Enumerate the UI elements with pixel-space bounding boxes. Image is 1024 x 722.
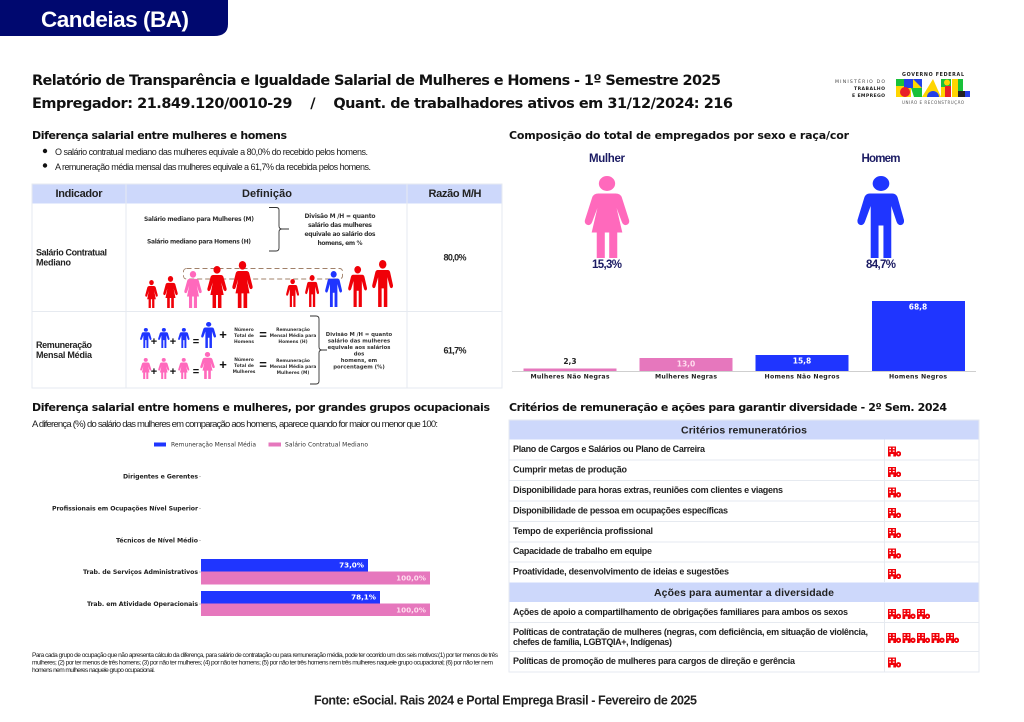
rows: ações: Ações de apoio a compartilhamento de obrigações familiares para ambos os sexos (513, 607, 848, 617)
icon: homem 84,7% (857, 153, 904, 271)
formula: homens: Total de (234, 333, 254, 339)
rows: ações: chefes de família, LGBTQIA+, Indígenas) (513, 637, 672, 647)
definition: salário mediano: Salário mediano para Homens (H) (147, 238, 251, 246)
formula: mulheres: Mensal Média para (270, 363, 316, 370)
icons: empresas ações (888, 609, 959, 668)
icon: mulher 15,3%: Mulher (589, 153, 626, 165)
formula: mulheres: Total de (234, 363, 254, 369)
chart legend (154, 442, 368, 448)
formula: homens: Número (234, 326, 254, 333)
formula: homens: Remuneração (276, 327, 310, 333)
formula: mulheres: Número (234, 356, 254, 363)
table header: Definição (242, 188, 292, 200)
definition: divisão M/H remuneração: porcentagem (%) (333, 364, 385, 370)
formula: homens: = (193, 336, 199, 348)
icon: mulher 15,3% (585, 153, 629, 271)
formula: homens: = (259, 327, 267, 342)
horizontal bar chart: Profissionais em Ocupações Nível Superior (52, 504, 199, 512)
horizontal bar chart: 73,0% (339, 560, 364, 570)
bullet text block: O salário contratual mediano das mulheres equivale a 80,0% do recebido pelos homens. (55, 147, 368, 157)
icons: mulheres ordenadas (145, 261, 342, 308)
definition: salário mediano (144, 208, 376, 251)
report title: Empregador: 21.849.120/0010-29 / Quant. de trabalhadores ativos em 31/12/2024: 216 (32, 96, 733, 112)
rows: critérios: Tempo de experiência profissional (513, 526, 653, 536)
definition: salário mediano: homens, em % (318, 240, 362, 247)
bar chart: sexo e raça: Mulheres Negras (655, 374, 717, 380)
formula: mulheres: + (170, 366, 176, 378)
chart legend: Remuneração Mensal Média (171, 442, 256, 448)
bar chart: sexo e raça: Mulheres Não Negras (530, 374, 610, 380)
formula: mulheres (140, 352, 316, 379)
table header: Razão M/H (428, 188, 482, 200)
heading: composição: Composição do total de empregados por sexo e raça/cor (509, 129, 850, 142)
rows: critérios: Disponibilidade de pessoa em ocupações específicas (513, 506, 728, 516)
rows: ações: Políticas de promoção de mulheres para cargos de direção e gerência (513, 656, 796, 666)
formula: homens: + (151, 336, 157, 348)
rows: critérios: Cumprir metas de produção (513, 464, 628, 474)
source note: Fonte: eSocial. Rais 2024 e Portal Emprega Brasil - Fevereiro de 2025 (314, 694, 697, 708)
formula: mulheres: + (219, 357, 227, 372)
report title (32, 73, 733, 112)
horizontal bar chart: 100,0% (396, 606, 426, 614)
definition: divisão M/H remuneração: Divisão M /H = quanto (326, 332, 393, 338)
definition: divisão M/H remuneração: equivale aos salários (328, 344, 390, 351)
rows: critérios: Disponibilidade para horas extras, reuniões com clientes e viagens (513, 485, 783, 495)
formula: homens: + (170, 336, 176, 348)
report title: Relatório de Transparência e Igualdade Salarial de Mulheres e Homens - 1º Semestre 2025 (32, 73, 721, 89)
rows: critérios: Proatividade, desenvolvimento de ideias e sugestões (513, 566, 729, 576)
definition: divisão M/H remuneração: homens, em (341, 358, 378, 364)
formula: mulheres: Mulheres (M) (277, 370, 309, 376)
logo: Ministério do Trabalho e Emprego / Governo Federal: TRABALHO (854, 86, 885, 92)
value: 80,0%: 80,0% (444, 252, 466, 262)
bar chart: sexo e raça (512, 301, 976, 380)
bar chart: sexo e raça: 2,3 (563, 357, 577, 366)
horizontal bar chart: Dirigentes e Gerentes (123, 474, 198, 480)
footnote: homens nem mulheres naquele grupo ocupacional. (32, 667, 155, 674)
bullet text block: A remuneração média mensal das mulheres equivale a 61,7% da recebida pelos homens. (55, 162, 371, 172)
logo: Ministério do Trabalho e Emprego / Governo Federal: GOVERNO FEDERAL (902, 72, 964, 78)
horizontal bar chart: Técnicos de Nível Médio (116, 536, 198, 544)
panel: diferença salarial entre mulheres e homens (32, 129, 502, 388)
rows: ações: Políticas de contratação de mulheres (negras, com deficiência, em situação de violência, (513, 627, 868, 637)
subheading text: A diferença (%) do salário das mulheres em comparação aos homens, aparece quando for maior ou menor que 100: (32, 419, 438, 430)
icons: homens ordenados (286, 260, 393, 307)
logo: Ministério do Trabalho e Emprego / Governo Federal: MINISTÉRIO DO (835, 77, 885, 85)
footnote (32, 652, 499, 674)
horizontal bar chart (52, 474, 430, 616)
row label: remuneração mensal média: Remuneração (36, 340, 92, 350)
horizontal bar chart: 100,0% (396, 574, 426, 582)
definition: salário mediano: Divisão M /H = quanto (304, 213, 376, 220)
formula: mulheres: = (259, 357, 267, 372)
logo: Ministério do Trabalho e Emprego / Governo Federal (835, 72, 970, 105)
horizontal bar chart: Trab. em Atividade Operacionais (87, 601, 198, 608)
rows: critérios: Plano de Cargos e Salários ou Plano de Carreira (513, 444, 706, 454)
definition: salário mediano: Salário mediano para Mulheres (M) (144, 216, 254, 223)
formula: homens: Mensal Média para (270, 332, 316, 339)
icons: empresas critérios (888, 446, 901, 579)
bar chart: sexo e raça: 15,8 (793, 356, 811, 366)
table: indicadores (32, 184, 502, 388)
icon: homem 84,7%: 84,7% (866, 259, 896, 271)
section header: critérios remuneratórios: Critérios remuneratórios (681, 424, 807, 436)
formula: mulheres: = (193, 366, 199, 378)
row label: salário contratual mediano (36, 248, 107, 268)
row label: remuneração mensal média: Mensal Média (36, 350, 93, 360)
row label: remuneração mensal média (36, 340, 93, 360)
definition: salário mediano: equivale ao salário dos (304, 231, 376, 238)
header tab: Candeias (BA) (0, 0, 228, 36)
horizontal bar chart: 78,1% (351, 592, 376, 602)
panel: diferença salarial por grupos ocupacionais (32, 401, 499, 674)
row label: salário contratual mediano: Salário Contratual (36, 248, 107, 258)
formula: homens: + (219, 327, 227, 342)
table header (56, 188, 482, 200)
definition: salário mediano: salário das mulheres (308, 222, 372, 229)
rows: ações (513, 607, 868, 666)
heading: grupos ocupacionais: Diferença salarial entre homens e mulheres, por grandes grupos ocupacionais (32, 401, 490, 414)
icon: homem 84,7%: Homem (862, 153, 900, 165)
formula: mulheres: Mulheres (233, 369, 256, 375)
heading: critérios: Critérios de remuneração e ações para garantir diversidade - 2º Sem. 2024 (509, 401, 947, 414)
panel: composição do total de empregados (509, 129, 976, 380)
panel: critérios de remuneração e ações (509, 401, 979, 672)
footnote: mulheres; (2) por ter menos de três homens; (3) por não ter mulheres; (4) por não ter homens; (5) por não ter três homens nem três mulheres naquele grupo ocupacional; (6) por não ter nem (32, 660, 493, 666)
definition: divisão M/H remuneração: dos (354, 352, 364, 358)
formula: mulheres: Remuneração (276, 358, 310, 364)
rows: critérios (513, 444, 783, 576)
value: 61,7%: 61,7% (444, 346, 466, 356)
horizontal bar chart: Trab. de Serviços Administrativos (83, 569, 198, 576)
formula: homens: Homens (234, 339, 254, 345)
table: critérios e ações (509, 420, 979, 672)
rows: critérios: Capacidade de trabalho em equipe (513, 546, 652, 556)
icon: mulher 15,3%: 15,3% (592, 259, 622, 271)
chart legend: Salário Contratual Mediano (285, 442, 368, 448)
section header: ações para aumentar a diversidade: Ações para aumentar a diversidade (654, 587, 834, 599)
logo: Ministério do Trabalho e Emprego / Governo Federal: E EMPREGO (852, 93, 885, 99)
bar chart: sexo e raça: Homens Negros (889, 374, 947, 380)
formula: mulheres: + (151, 366, 157, 378)
bar chart: sexo e raça: 68,8 (909, 302, 927, 312)
definition: divisão M/H remuneração: salário das mulheres (328, 338, 390, 344)
bar chart: sexo e raça: 13,0 (677, 360, 695, 368)
row label: salário contratual mediano: Mediano (36, 258, 72, 268)
definition: divisão M/H remuneração (310, 316, 393, 384)
bullet text block (43, 147, 371, 172)
formula: homens: Homens (H) (278, 339, 308, 345)
bar chart: sexo e raça: Homens Não Negros (764, 374, 840, 380)
formula: homens (140, 322, 316, 348)
footnote: Para cada grupo de ocupação que não apresenta cálculo da diferença, para salário de contratação ou para remuneração média, pode ter ocorrido um dos seis motivos:(1) por ter menos de três (32, 652, 499, 659)
heading: diferença salarial: Diferença salarial entre mulheres e homens (32, 129, 287, 142)
table header: Indicador (56, 188, 103, 200)
header tab: Candeias (BA): Candeias (BA) (41, 7, 189, 32)
logo: Ministério do Trabalho e Emprego / Governo Federal: UNIÃO E RECONSTRUÇÃO (902, 100, 964, 105)
